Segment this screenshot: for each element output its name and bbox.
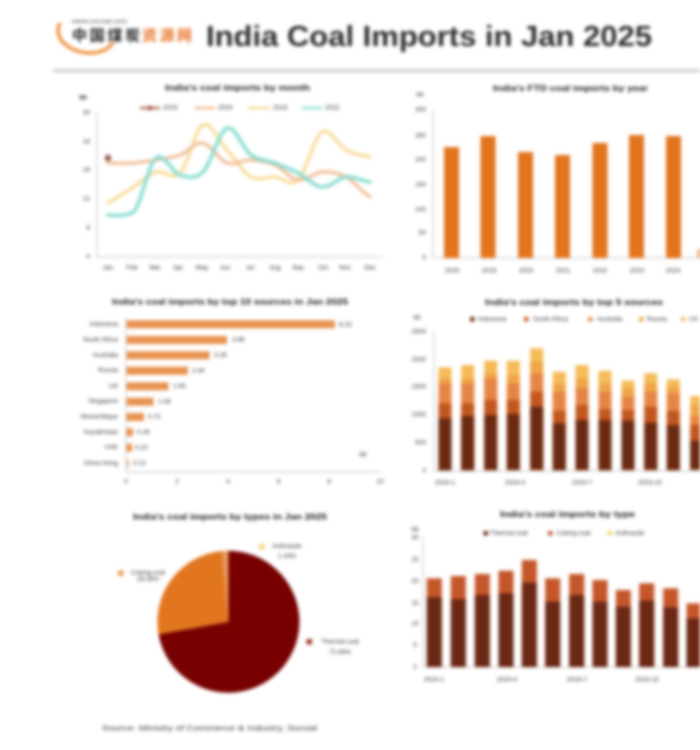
value labels: 2.44 bbox=[192, 368, 205, 374]
x axis labels bbox=[435, 480, 662, 486]
segment: Indonesia bbox=[438, 407, 700, 470]
icon: logo bbox=[58, 19, 192, 53]
x axis labels: Feb bbox=[126, 264, 138, 272]
category labels: China Hong bbox=[84, 460, 118, 467]
y axis: 200 bbox=[415, 156, 426, 164]
y axis: Mt bbox=[79, 94, 88, 102]
label: thermal coal bbox=[306, 638, 359, 656]
chart: coal imports by month bbox=[79, 84, 383, 272]
category labels: South Africa bbox=[83, 336, 118, 344]
x axis labels: 2020 bbox=[519, 268, 534, 274]
legend: Coking coal bbox=[556, 530, 591, 537]
y axis: 100 bbox=[415, 206, 426, 214]
x axis labels: 2019 bbox=[482, 268, 497, 274]
source note: Source: Ministry of Commerce & Industry, Sxcoal bbox=[102, 724, 317, 732]
x axis labels: Apr bbox=[173, 264, 184, 272]
y axis: 30 bbox=[411, 534, 419, 542]
label: coking coal bbox=[118, 570, 166, 583]
chart: types in Jan 2025 bbox=[102, 512, 359, 732]
x axis labels: 2018 bbox=[445, 268, 460, 274]
y axis: 20 bbox=[411, 578, 419, 585]
legend: Thermal coal bbox=[490, 530, 528, 537]
chart: coal imports by year bbox=[415, 84, 700, 274]
label: anthracite: 1.43% bbox=[278, 553, 296, 560]
y axis: 0 bbox=[413, 664, 417, 671]
legend bbox=[140, 104, 340, 112]
heading: India's coal imports by month bbox=[165, 84, 310, 92]
label: anthracite bbox=[259, 543, 302, 560]
x axis labels: Jul bbox=[246, 264, 255, 272]
segment: coking coal bbox=[427, 560, 700, 667]
x axis labels: Jun bbox=[220, 264, 231, 272]
legend: 2024 bbox=[218, 104, 233, 112]
category labels: UAE bbox=[105, 444, 119, 451]
legend: South Africa bbox=[533, 316, 568, 323]
heading: India's coal imports by types in Jan 2025 bbox=[133, 512, 328, 522]
value labels: 1.65 bbox=[173, 383, 186, 390]
y axis: 50 bbox=[419, 230, 426, 236]
y axis: 2000 bbox=[412, 356, 426, 364]
x axis labels: Aug bbox=[269, 264, 281, 272]
x axis: 10 bbox=[376, 478, 384, 486]
y axis bbox=[79, 94, 383, 260]
y axis: Mt bbox=[411, 526, 419, 534]
x axis: 4 bbox=[226, 478, 230, 486]
y axis: Mt bbox=[413, 314, 421, 322]
heading: India's FTD coal imports by year bbox=[493, 84, 648, 93]
x axis labels: 2024-4 bbox=[497, 676, 517, 684]
y axis: 15 bbox=[411, 600, 419, 607]
legend: Anthracite bbox=[615, 530, 645, 537]
legend bbox=[470, 316, 699, 323]
x axis labels bbox=[424, 676, 659, 684]
value labels: 0.23 bbox=[135, 444, 148, 452]
x axis labels: 2024-4 bbox=[505, 480, 525, 486]
value labels bbox=[133, 322, 352, 467]
x axis labels: Dec bbox=[364, 264, 377, 272]
label: thermal coal: Thermal coal bbox=[321, 638, 359, 646]
legend: US bbox=[689, 316, 699, 323]
segment: thermal coal bbox=[427, 583, 700, 667]
x axis labels: 2024-1 bbox=[424, 676, 444, 684]
line: 2022 bbox=[108, 128, 370, 216]
value labels: 0.28 bbox=[137, 429, 150, 436]
x axis: Mt bbox=[359, 452, 367, 458]
slice: thermal coal bbox=[158, 551, 299, 693]
chart: top 5 sources bbox=[412, 298, 700, 486]
heading: India's coal imports by top 10 sources in Jan 2025 bbox=[112, 298, 349, 306]
legend: Australia bbox=[597, 316, 623, 323]
y axis: 0 bbox=[86, 254, 90, 260]
legend: 2025 bbox=[163, 104, 178, 112]
x axis labels: Oct bbox=[318, 264, 328, 272]
x axis: 2 bbox=[175, 478, 179, 486]
y axis: 300 bbox=[415, 106, 426, 114]
x axis: 6 bbox=[277, 478, 281, 486]
label: coking coal: 26.08% bbox=[137, 576, 159, 583]
value labels: 1.08 bbox=[158, 398, 171, 406]
x axis labels: 2023 bbox=[630, 268, 645, 274]
x axis bbox=[124, 316, 384, 486]
y axis: 150 bbox=[415, 182, 426, 188]
x axis labels: Mar bbox=[149, 264, 161, 272]
y axis: 0 bbox=[422, 468, 426, 474]
value labels: 0.13 bbox=[133, 460, 146, 467]
segment: Russia bbox=[438, 362, 700, 470]
line: 2024 bbox=[108, 143, 370, 197]
segment: US bbox=[438, 348, 700, 470]
x axis labels: 2021 bbox=[556, 268, 571, 274]
category labels: Mozambique bbox=[81, 414, 118, 420]
bars bbox=[444, 135, 700, 258]
value labels: 3.98 bbox=[232, 336, 245, 344]
y axis: 5 bbox=[413, 642, 417, 649]
value labels: 8.23 bbox=[339, 322, 352, 328]
x axis labels: 2024-10 bbox=[635, 676, 659, 684]
header bbox=[58, 19, 652, 53]
point: Jan 2025 bbox=[105, 155, 111, 161]
segment: South Africa bbox=[438, 392, 700, 470]
legend: Russia bbox=[647, 316, 667, 323]
x axis labels bbox=[445, 268, 681, 274]
icon: logo: www.sxcoal.com bbox=[72, 19, 127, 25]
y axis: 1000 bbox=[412, 412, 426, 418]
icon: logo: 资源网 bbox=[142, 28, 192, 44]
y axis: 0 bbox=[422, 254, 426, 262]
legend: Indonesia bbox=[478, 316, 507, 323]
title: India Coal Imports in Jan 2025 bbox=[206, 21, 652, 53]
heading: India's coal imports by type bbox=[500, 510, 636, 519]
x axis labels bbox=[103, 264, 377, 272]
x axis labels: May bbox=[196, 264, 209, 272]
x axis labels: 2024-7 bbox=[567, 676, 587, 684]
y axis: 25 bbox=[411, 556, 419, 564]
label: anthracite: Anthracite bbox=[272, 543, 302, 550]
slice: anthracite bbox=[222, 551, 228, 622]
segment: Australia bbox=[438, 373, 700, 470]
y axis: 2500 bbox=[412, 328, 426, 336]
legend: 2022 bbox=[325, 104, 340, 112]
x axis labels: 2024-10 bbox=[638, 480, 662, 486]
x axis labels: 2024-1 bbox=[435, 480, 455, 486]
label: thermal coal: 72.49% bbox=[329, 649, 351, 656]
slice: coking coal bbox=[157, 551, 228, 634]
y axis bbox=[411, 526, 700, 671]
value labels: 0.72 bbox=[148, 414, 161, 420]
x axis labels: 2024 bbox=[666, 268, 681, 274]
chart: top 10 sources in Jan 2025 bbox=[81, 298, 384, 486]
legend: 2023 bbox=[273, 104, 288, 112]
x axis: 0 bbox=[124, 478, 128, 486]
y axis: 250 bbox=[415, 132, 426, 140]
legend bbox=[484, 530, 645, 537]
x axis labels: Nov bbox=[339, 264, 352, 272]
label: coking coal: Coking coal bbox=[131, 570, 166, 576]
line: 2023 bbox=[108, 125, 370, 203]
value labels: 3.28 bbox=[214, 352, 227, 359]
y axis: 10 bbox=[411, 620, 419, 628]
x axis labels: Sep bbox=[292, 264, 304, 272]
y axis: 24 bbox=[83, 138, 90, 146]
y axis: 18 bbox=[83, 166, 90, 174]
category labels: Singapore bbox=[88, 398, 118, 405]
bars bbox=[126, 320, 335, 467]
y axis bbox=[415, 92, 700, 262]
x axis labels: 2024-7 bbox=[572, 480, 592, 486]
y axis: 12 bbox=[83, 196, 90, 202]
pie chart bbox=[157, 551, 299, 693]
category labels: Russia bbox=[98, 367, 118, 374]
x axis: 8 bbox=[327, 478, 331, 486]
x axis labels: 2022 bbox=[593, 268, 608, 274]
icon: logo: 中国煤炭 bbox=[72, 28, 140, 44]
category labels: Indonesia bbox=[90, 321, 118, 328]
category labels: US bbox=[109, 383, 119, 390]
chart: imports by type bbox=[411, 510, 700, 684]
heading: India's coal imports by top 5 sources bbox=[485, 298, 664, 307]
y axis: 30 bbox=[83, 110, 90, 116]
category labels bbox=[81, 321, 119, 467]
category labels: Kazakhstan bbox=[84, 429, 118, 436]
y axis: 500 bbox=[415, 440, 426, 446]
category labels: Australia bbox=[93, 352, 118, 359]
y axis: 1500 bbox=[412, 384, 426, 390]
y axis bbox=[412, 314, 700, 474]
x axis labels: Jan bbox=[103, 264, 114, 272]
y axis: 6 bbox=[86, 224, 90, 232]
y axis: Mt bbox=[416, 92, 424, 98]
